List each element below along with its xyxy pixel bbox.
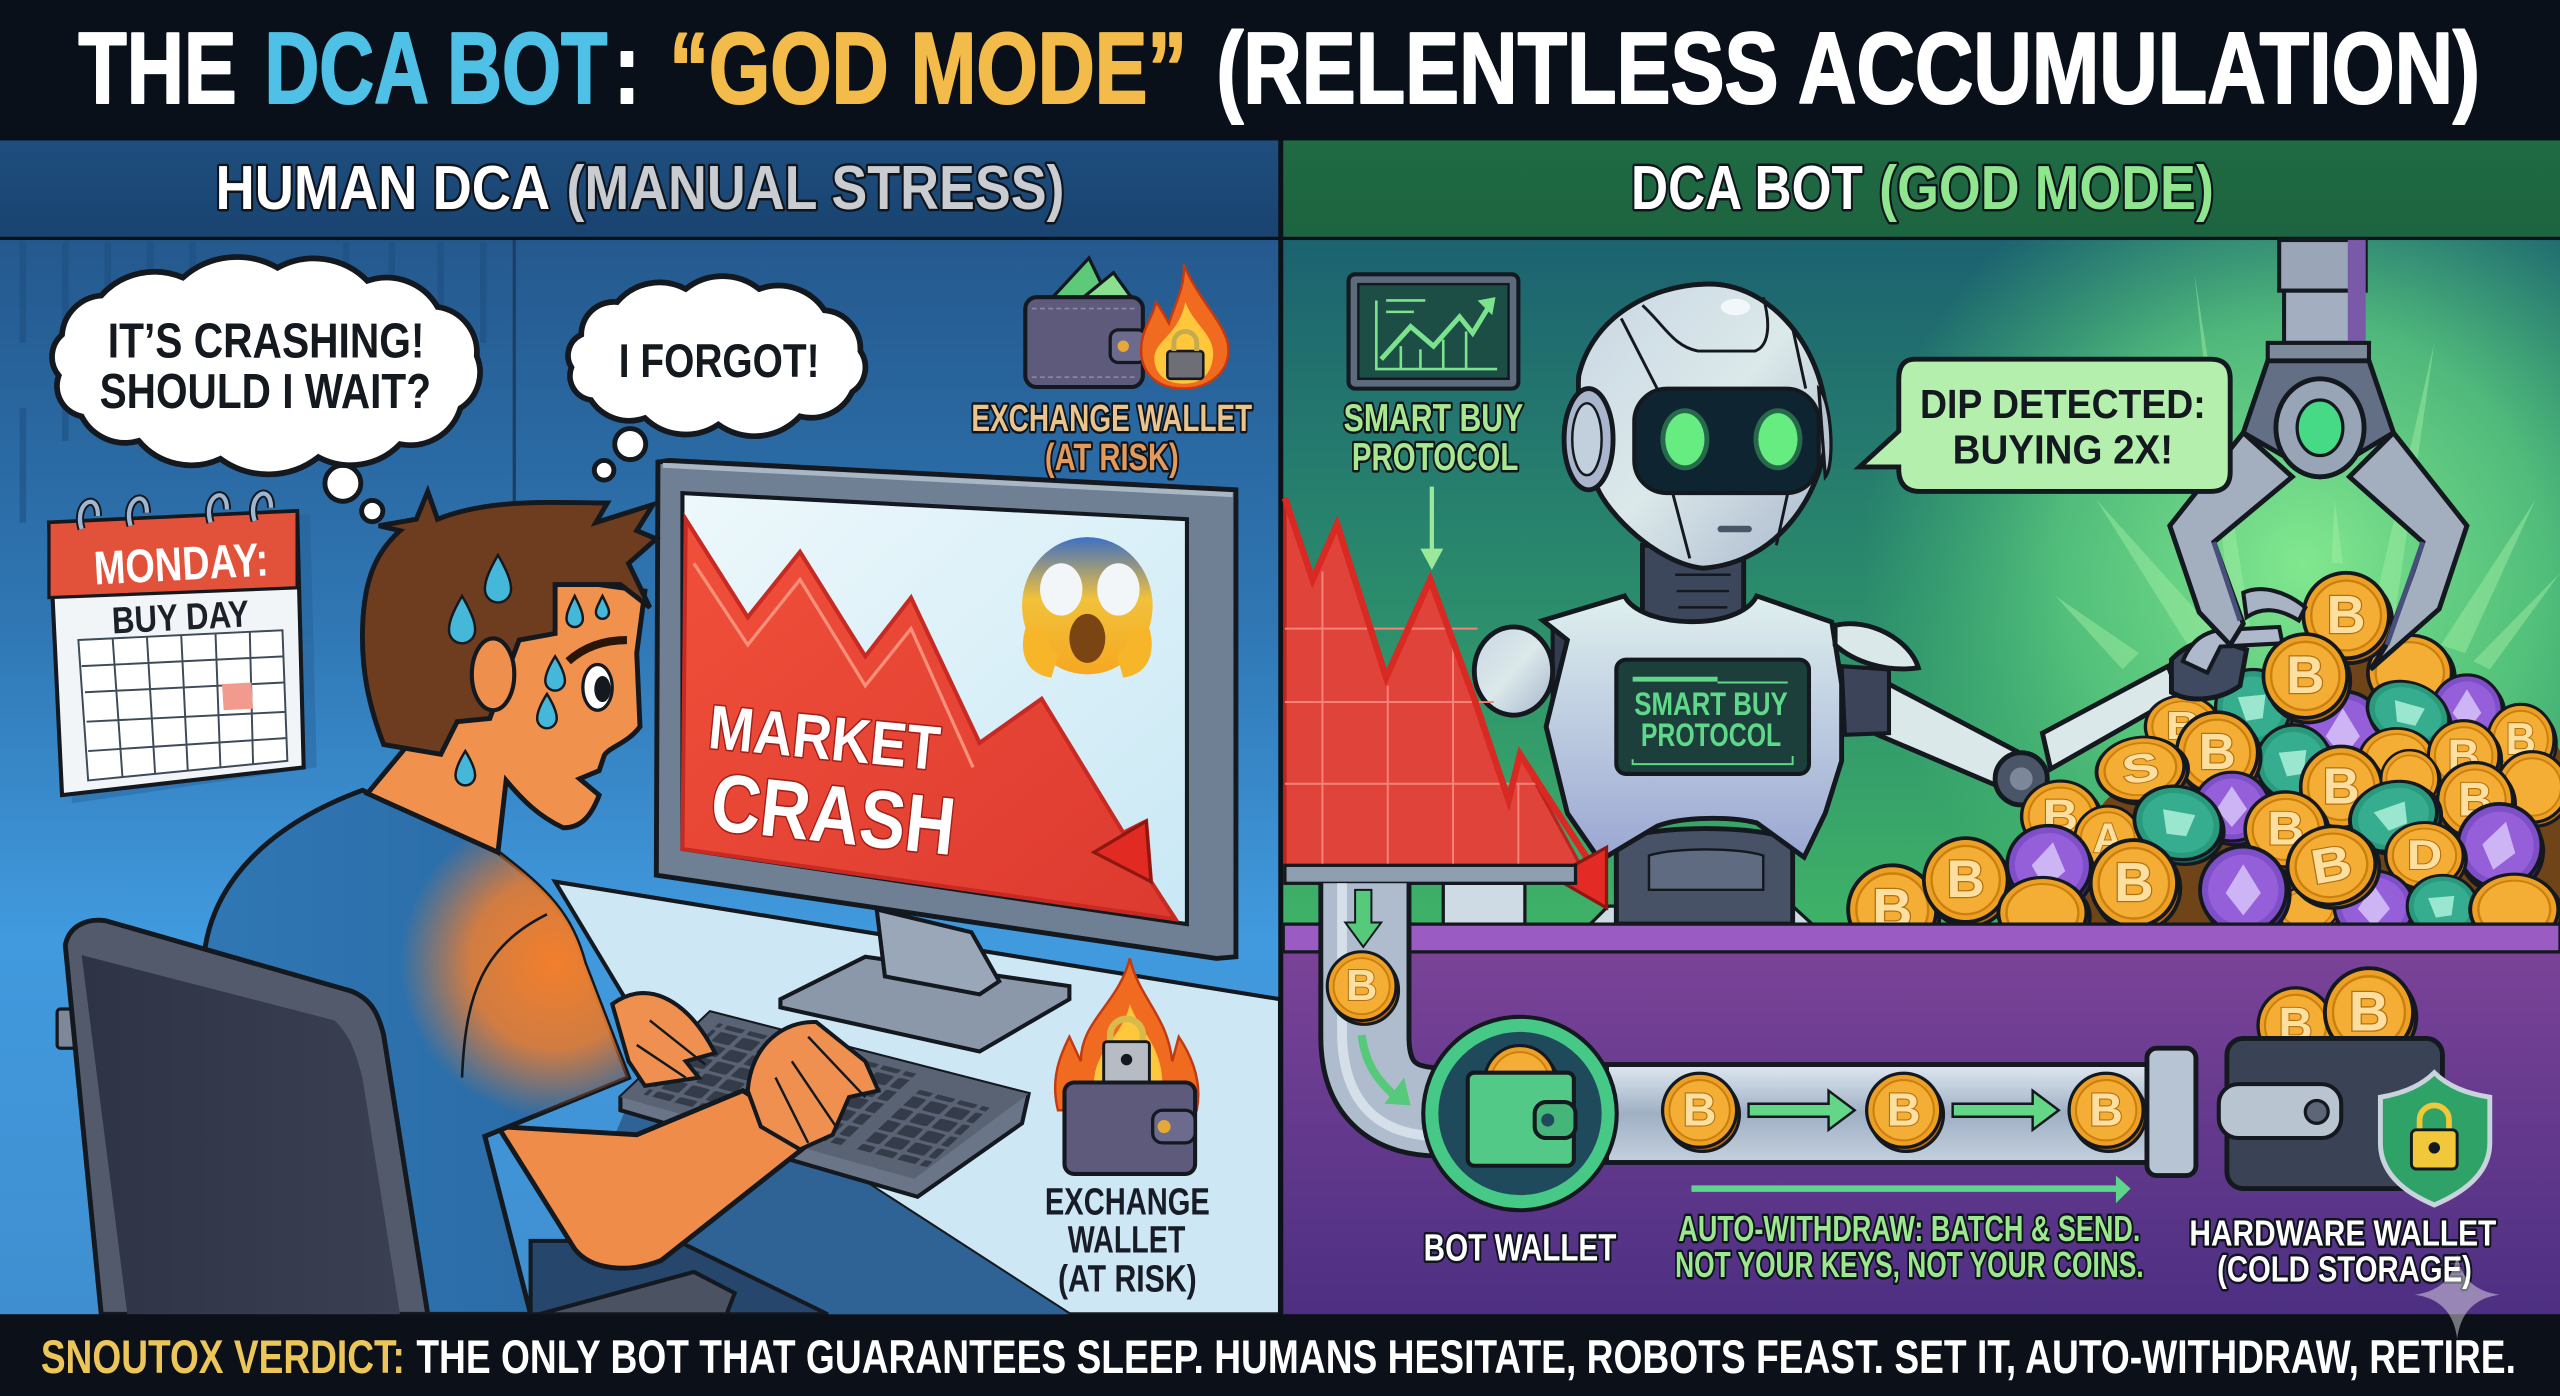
title: : (614, 12, 640, 125)
coin pile (1848, 573, 2560, 958)
speech bubble: dip detected (1860, 359, 2230, 491)
arrow: tube left (1749, 1091, 1855, 1130)
title (78, 12, 2480, 125)
person at desk (204, 491, 878, 1314)
robot left joint (1553, 622, 1576, 748)
panel: DCA bot (1283, 140, 2560, 1314)
thought bubble: forgot: I FORGOT! (619, 335, 820, 388)
icon: wall calendar: BUY DAY (111, 592, 250, 641)
robot chest screen: SMART BUY (1634, 685, 1788, 722)
speech bubble: dip detected: BUYING 2X! (1953, 427, 2173, 473)
robot head (1564, 284, 1831, 568)
desk (539, 882, 1280, 1314)
label: auto-withdraw: NOT YOUR KEYS, NOT YOUR COINS. (1675, 1244, 2144, 1285)
red crash chart with arrow (1285, 498, 1607, 908)
chart label: market crash: MARKET (706, 693, 943, 784)
front coin (2263, 634, 2350, 722)
robot torso (1543, 596, 1842, 860)
robot chest screen (1616, 660, 1809, 774)
arrow: pointing to the dip (1420, 487, 1443, 570)
office chair (57, 920, 735, 1314)
red crash chart (682, 519, 1176, 919)
label: smart buy protocol: SMART BUY (1344, 397, 1523, 440)
icon: exchange wallet on fire, bottom (1055, 958, 1198, 1174)
label: exchange wallet bottom: WALLET (1068, 1218, 1185, 1260)
icon: wall calendar: MONDAY: (92, 533, 270, 596)
keyboard (620, 1012, 1029, 1197)
speech bubble: dip detected: DIP DETECTED: (1920, 381, 2206, 427)
coin pile: B (2307, 835, 2356, 895)
arrow: curve in pipe (1362, 1035, 1411, 1105)
robot right arm (1842, 666, 2180, 805)
label: exchange wallet bottom (1045, 1181, 1210, 1299)
title: THE (78, 12, 237, 125)
icon: screaming face emoji (1022, 537, 1153, 678)
claw left finger (2170, 433, 2292, 645)
coin pile: B (2166, 705, 2200, 748)
legs (531, 1241, 828, 1314)
label: exchange wallet top: (AT RISK) (1045, 436, 1179, 478)
icon: bot wallet (1424, 1017, 1616, 1210)
thought bubble: crashing: IT’S CRASHING! (108, 315, 424, 369)
coin pile: B (2267, 802, 2304, 855)
monitor stand (780, 909, 1069, 1051)
label: hardware wallet: (COLD STORAGE) (2217, 1249, 2472, 1290)
panel heading: DCA bot: (GOD MODE) (1879, 154, 2214, 223)
icon: hardware wallet: B (2278, 998, 2313, 1051)
tube coins (1663, 1073, 2146, 1151)
icon: sparkle watermark (2415, 1254, 2500, 1339)
withdraw tube (1607, 1048, 2196, 1176)
label: bot wallet: BOT WALLET (1424, 1226, 1616, 1268)
robot hand (2171, 589, 2305, 699)
chart label: market crash (706, 693, 960, 873)
arrow: tube right (1953, 1091, 2059, 1130)
claw right finger (2349, 433, 2467, 669)
verdict bar: SNOUTOX VERDICT: (41, 1331, 405, 1384)
coin pile: B (2323, 758, 2360, 815)
computer monitor (656, 460, 1236, 1051)
forearm (498, 1091, 816, 1268)
hand on keyboard, front (748, 1022, 878, 1149)
hair (362, 491, 656, 754)
label: hardware wallet (2189, 1213, 2496, 1290)
label: exchange wallet top (971, 397, 1252, 478)
robot (1443, 284, 2180, 924)
robot base struts (1443, 883, 1525, 924)
icon: security shield (2380, 1073, 2490, 1205)
robot lower body (1590, 829, 1812, 924)
label: smart buy protocol: PROTOCOL (1352, 436, 1518, 479)
label: exchange wallet bottom: EXCHANGE (1045, 1181, 1210, 1223)
icon: wall calendar (49, 494, 317, 803)
coin pile: B (2043, 791, 2078, 840)
thought bubble: forgot (568, 276, 865, 480)
panel heading: DCA bot: DCA BOT (1631, 154, 1863, 223)
coin pile: A (2093, 815, 2123, 862)
claw shaft (2268, 240, 2369, 362)
icon: hardware wallet: B (2349, 980, 2389, 1042)
face and neck (367, 580, 645, 852)
arrow: down in pipe (1345, 890, 1381, 947)
coin pile: B (2327, 585, 2366, 645)
coin pile: S (2119, 744, 2162, 793)
robot right shoulder (1835, 624, 1918, 669)
coin pile: B (2506, 715, 2536, 764)
icon: exchange wallet on fire, top (1025, 258, 1228, 389)
purple base panel (1283, 924, 2560, 1314)
tube coins: B (1887, 1083, 1921, 1135)
claw hub (2243, 361, 2393, 477)
coin pile: B (2114, 852, 2154, 913)
thought bubble: crashing (52, 257, 480, 522)
tube coins: B (1683, 1083, 1716, 1135)
t-shirt torso (204, 790, 629, 1314)
ear (472, 638, 514, 710)
panel divider (1278, 140, 1283, 1314)
coin pile: B (2458, 772, 2492, 825)
panel heading: human DCA (0, 140, 1278, 237)
front coin: B (2286, 646, 2324, 705)
panel heading: human DCA: HUMAN DCA (216, 154, 550, 223)
eye and brow (568, 640, 627, 710)
hand on keyboard, back (612, 993, 715, 1086)
label: smart buy protocol (1344, 397, 1523, 479)
label: hardware wallet: HARDWARE WALLET (2189, 1213, 2496, 1254)
icon: hardware wallet (2219, 968, 2490, 1205)
panel: human DCA (0, 140, 1280, 1314)
label: auto-withdraw (1675, 1208, 2144, 1285)
title: “GOD MODE” (669, 12, 1187, 125)
coin in pipe: B (1346, 962, 1377, 1010)
coin pile: B (2199, 723, 2236, 780)
coin pile: B (1947, 850, 1985, 909)
tube coins: B (2089, 1083, 2123, 1135)
coin pile: B (2448, 731, 2480, 780)
coin pile: D (2407, 831, 2442, 878)
label: auto-withdraw: AUTO-WITHDRAW: BATCH & SEND. (1678, 1208, 2140, 1249)
chart label: market crash: CRASH (707, 757, 960, 873)
room wall (0, 240, 1278, 1314)
robot left shoulder (1474, 627, 1553, 715)
mechanical claw (2170, 240, 2467, 669)
title: DCA BOT (264, 12, 607, 125)
thought bubble: crashing: SHOULD I WAIT? (100, 365, 431, 419)
coin in pipe (1327, 952, 1399, 1024)
label: exchange wallet top: EXCHANGE WALLET (971, 397, 1252, 439)
robot chest screen: PROTOCOL (1641, 716, 1781, 753)
arrow: auto-withdraw (1691, 1176, 2131, 1203)
green background with rays (1283, 240, 2560, 926)
verdict bar (0, 1314, 2560, 1396)
icon: rising chart (1349, 274, 1518, 389)
robot neck (1642, 545, 1744, 622)
icon: sweat drops (449, 555, 609, 785)
coin pile: B (1872, 877, 1912, 939)
panel heading: DCA bot (1283, 140, 2560, 237)
label: exchange wallet bottom: (AT RISK) (1058, 1257, 1197, 1299)
pipe from chart to bot wallet (1327, 883, 1440, 1136)
panel heading: human DCA: (MANUAL STRESS) (567, 154, 1064, 223)
